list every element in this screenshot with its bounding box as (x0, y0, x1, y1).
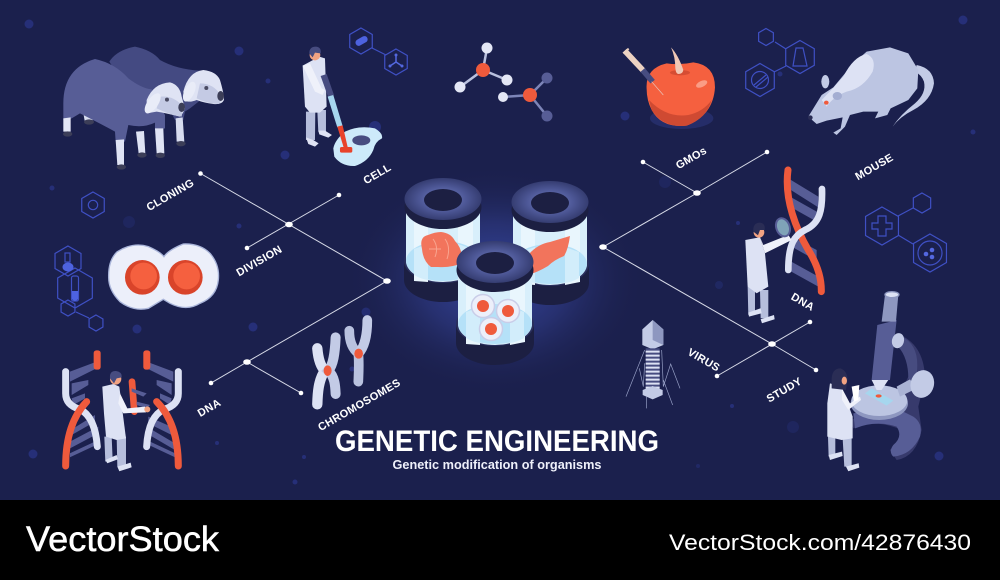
icon: hexagon medical right (866, 193, 946, 272)
labels: DNA (789, 291, 816, 314)
central strand fragment (132, 382, 134, 412)
icon: DNA with scientist left (66, 350, 178, 471)
icon: DNA helix with scientist right (745, 170, 822, 323)
icon: microscope with scientist (827, 292, 937, 471)
icon: hexagon chemistry top right (746, 28, 814, 96)
icon: hexagon lab flasks left (55, 246, 103, 331)
icon: chromosomes (317, 320, 367, 404)
background dots (24, 16, 976, 484)
icon: glass jar cells (456, 241, 534, 365)
connector lines (198, 150, 818, 395)
icon: hexagon ring (82, 192, 104, 218)
central glow (345, 165, 645, 395)
labels: STUDY (765, 375, 805, 405)
labels: VIRUS (685, 346, 722, 374)
scientist (748, 287, 768, 318)
subtitle: Genetic modification of organisms (392, 458, 602, 472)
footer bar: VectorStock.com/42876430 (669, 530, 971, 555)
labels: CELL (362, 162, 393, 187)
icon: glass jar brain (404, 178, 482, 302)
icon: molecules (454, 42, 552, 122)
icon: mouse (808, 47, 934, 135)
labels: MOUSE (853, 152, 896, 183)
icon: glass jar liver (511, 181, 589, 305)
icon: sheep (63, 47, 224, 170)
labels (145, 145, 896, 434)
icon: scientist with pipette and cell (303, 47, 382, 166)
labels: DNA (196, 397, 223, 420)
cell (333, 127, 382, 166)
icon: virus (626, 320, 680, 408)
labels: CHROMOSOMES (316, 377, 403, 434)
scientist (104, 437, 126, 467)
labels: DIVISION (235, 244, 284, 279)
icon: apple with syringe (623, 47, 715, 129)
icon: dividing cell (109, 244, 219, 309)
labels: GMOs (674, 145, 709, 172)
footer bar: VectorStock (26, 520, 220, 559)
title: GENETIC ENGINEERING (335, 425, 659, 458)
footer bar (0, 500, 1000, 580)
labels: CLONING (145, 177, 196, 214)
icon: hexagon pill and molecule (350, 28, 407, 75)
scientist (828, 437, 852, 467)
